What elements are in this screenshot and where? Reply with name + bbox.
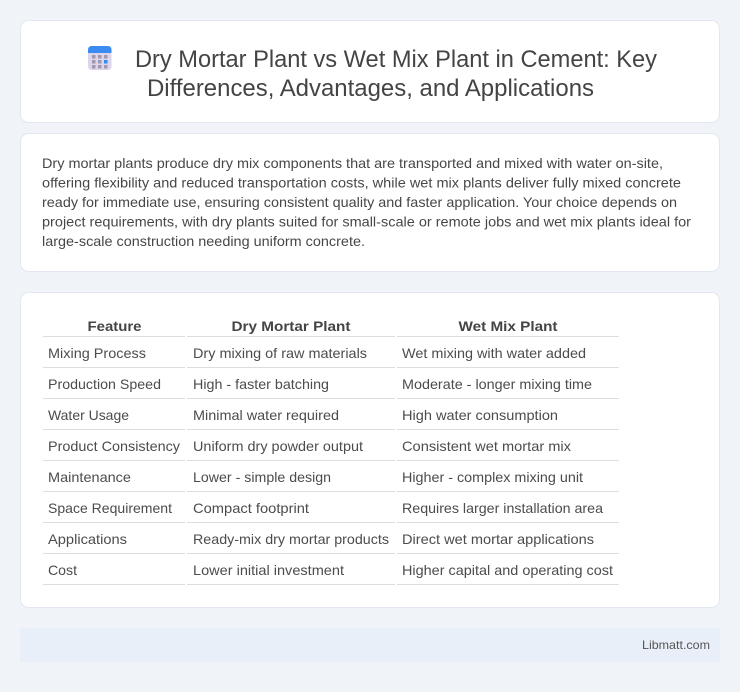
row: Product Consistency: Uniform dry powder output [193, 438, 363, 454]
row: Cost: Cost [48, 562, 77, 578]
row: Product Consistency: Product Consistency [48, 438, 180, 454]
row: Maintenance: Higher - complex mixing unit [402, 469, 583, 485]
row: Maintenance: Lower - simple design [193, 469, 331, 485]
row: Production Speed: Production Speed [48, 376, 161, 392]
title: Dry Mortar Plant vs Wet Mix Plant in Cement: Key [135, 46, 657, 73]
row: Water Usage: High water consumption [402, 407, 558, 423]
row: Space Requirement: Requires larger installation area [402, 500, 603, 516]
row: Applications: Ready-mix dry mortar products [193, 531, 389, 547]
row: Production Speed: High - faster batching [193, 376, 329, 392]
table header row: Feature [88, 318, 142, 334]
row: Mixing Process: Wet mixing with water added [402, 345, 586, 361]
panel: summary paragraph [20, 134, 720, 272]
row: Applications: Applications [48, 531, 127, 547]
row: Space Requirement [48, 500, 603, 516]
row: Applications: Direct wet mortar applications [402, 531, 594, 547]
row: Product Consistency [48, 438, 571, 454]
row: Applications [48, 531, 594, 547]
icon: calendar grid [88, 46, 112, 70]
panel: summary paragraph: large-scale construction needing uniform concrete. [42, 233, 365, 249]
row: Mixing Process: Dry mixing of raw materials [193, 345, 367, 361]
row: Water Usage: Water Usage [48, 407, 129, 423]
row: Maintenance: Maintenance [48, 469, 131, 485]
panel: summary paragraph: Dry mortar plants produce dry mix components that are transported and mixed with water on-site, [42, 155, 663, 171]
footer bar: Libmatt.com [642, 638, 710, 652]
table header row: Dry Mortar Plant [232, 318, 351, 334]
panel: summary paragraph: offering flexibility and reduced transportation costs, while wet mix plants deliver fully mixed concrete [42, 174, 681, 190]
row: Cost: Higher capital and operating cost [402, 562, 613, 578]
row: Product Consistency: Consistent wet mortar mix [402, 438, 571, 454]
row: Cost: Lower initial investment [193, 562, 344, 578]
row: Production Speed: Moderate - longer mixing time [402, 376, 592, 392]
table header row: Wet Mix Plant [458, 318, 558, 334]
title: Differences, Advantages, and Applications [147, 75, 594, 102]
row: Production Speed [48, 376, 592, 392]
panel: summary paragraph: ready for immediate use, ensuring consistent quality and faster application. Your choice depends on [42, 194, 677, 210]
row: Space Requirement: Compact footprint [193, 500, 309, 516]
panel: title header [20, 20, 720, 122]
panel: comparison table [20, 292, 720, 608]
title [135, 46, 657, 102]
table header row [88, 318, 558, 334]
row: Mixing Process: Mixing Process [48, 345, 146, 361]
row: Cost [48, 562, 613, 578]
row: Maintenance [48, 469, 583, 485]
row: Water Usage: Minimal water required [193, 407, 339, 423]
row: Mixing Process [48, 345, 586, 361]
footer bar [20, 628, 720, 662]
panel: summary paragraph: project requirements, with dry plants suited for small-scale or remote jobs and wet mix plants ideal for [42, 214, 691, 230]
row: Space Requirement: Space Requirement [48, 500, 172, 516]
row: Water Usage [48, 407, 558, 423]
